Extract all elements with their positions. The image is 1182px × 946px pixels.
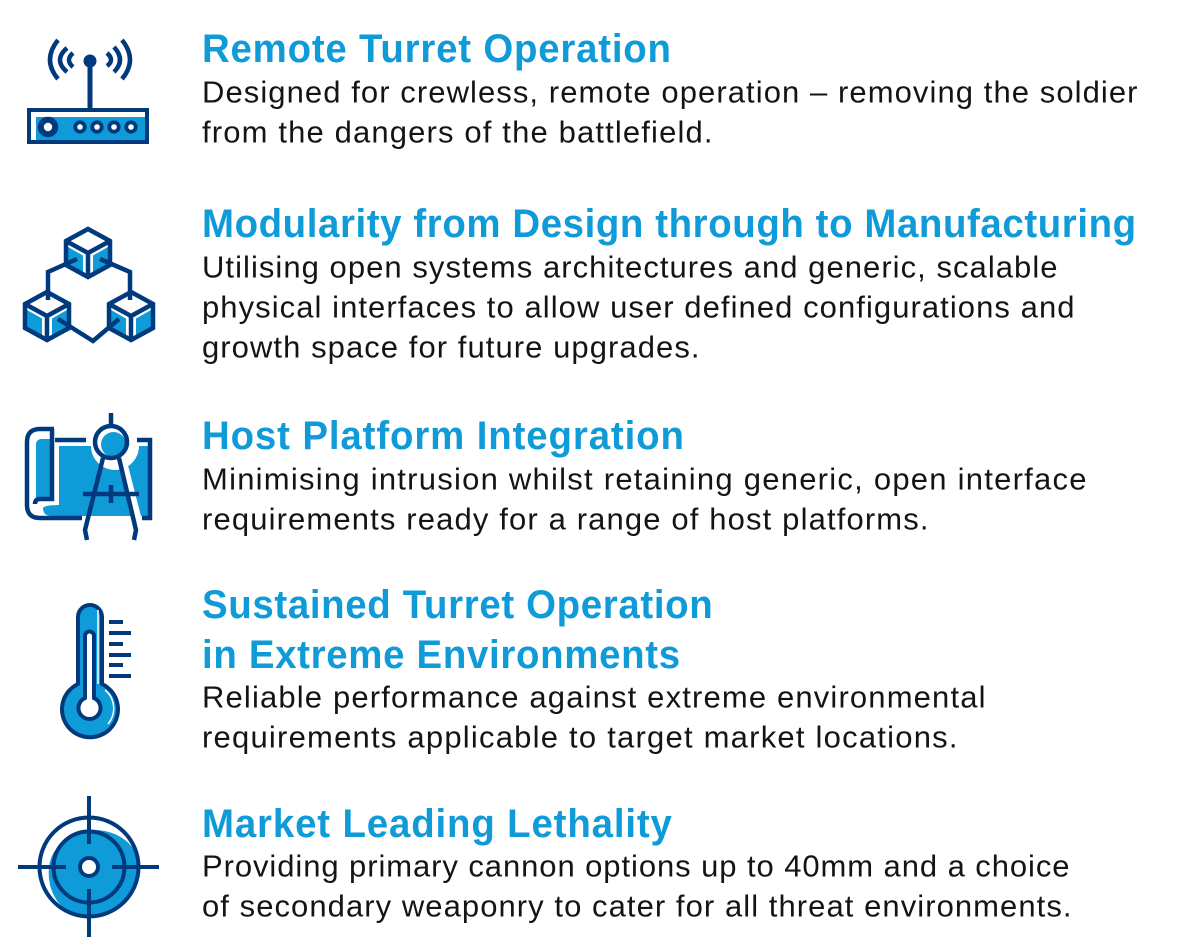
text: lethality description — [202, 848, 1072, 924]
icon: blueprint and compass — [27, 413, 150, 540]
heading: modularity: Modularity from Design through to Manufacturing — [202, 202, 1136, 246]
heading: host platform integration: Host Platform Integration — [202, 414, 684, 458]
text: remote turret description: from the dangers of the battlefield. — [202, 114, 712, 150]
text: modularity description: growth space for future upgrades. — [202, 330, 700, 364]
text: host platform description — [202, 462, 1086, 536]
icon: target crosshair — [18, 796, 159, 937]
text: sustained operation description — [202, 680, 986, 754]
heading: market leading lethality: Market Leading Lethality — [202, 802, 672, 846]
text: lethality description: Providing primary cannon options up to 40mm and a choice — [202, 848, 1070, 884]
icon: router with antenna — [29, 40, 147, 142]
text: modularity description — [202, 250, 1074, 364]
text: host platform description: Minimising intrusion whilst retaining generic, open interface — [202, 462, 1086, 496]
icon: thermometer — [62, 605, 131, 737]
heading: sustained turret operation: Sustained Turret Operation — [202, 583, 713, 627]
text: remote turret description — [202, 74, 1138, 150]
text: modularity description: physical interfaces to allow user defined configurations and — [202, 290, 1074, 324]
text: remote turret description: Designed for crewless, remote operation – removing the soldier — [202, 74, 1138, 110]
icon: connected cubes — [25, 229, 153, 341]
heading: remote turret operation: Remote Turret Operation — [202, 27, 671, 71]
text: modularity description: Utilising open systems architectures and generic, scalable — [202, 250, 1058, 284]
text: sustained operation description: Reliable performance against extreme environmental — [202, 680, 986, 714]
text: sustained operation description: requirements applicable to target market locations. — [202, 720, 958, 754]
text: lethality description: of secondary weaponry to cater for all threat environments. — [202, 888, 1072, 924]
heading: sustained turret operation — [202, 583, 713, 677]
heading: sustained turret operation: in Extreme Environments — [202, 633, 680, 677]
text: host platform description: requirements ready for a range of host platforms. — [202, 502, 928, 536]
